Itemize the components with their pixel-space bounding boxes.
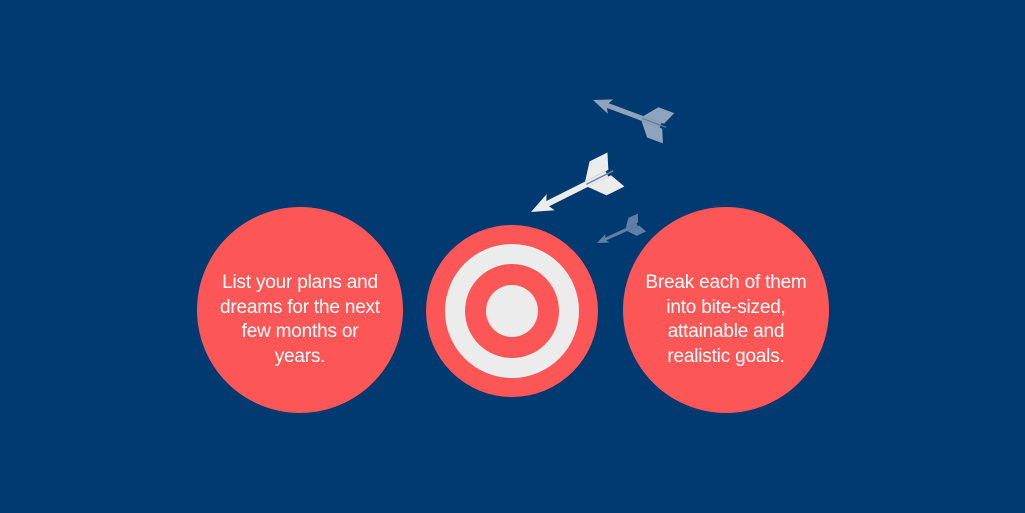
right circle: goals — [623, 207, 829, 413]
left circle: plans: List your plans and — [222, 272, 378, 293]
right circle: goals: Break each of them — [645, 272, 807, 293]
arrow: top faded — [587, 85, 674, 143]
right circle: goals: attainable and — [668, 321, 784, 342]
arrow: white main — [522, 152, 624, 229]
left circle: plans — [197, 207, 403, 413]
left circle: plans: few months or — [242, 321, 358, 342]
left circle: plans: dreams for the next — [220, 296, 380, 318]
right circle: goals: realistic goals. — [667, 346, 785, 366]
right circle: goals: into bite-sized, — [666, 296, 786, 318]
target — [426, 225, 598, 397]
left circle: plans: years. — [275, 346, 325, 366]
arrow: small — [593, 214, 646, 252]
